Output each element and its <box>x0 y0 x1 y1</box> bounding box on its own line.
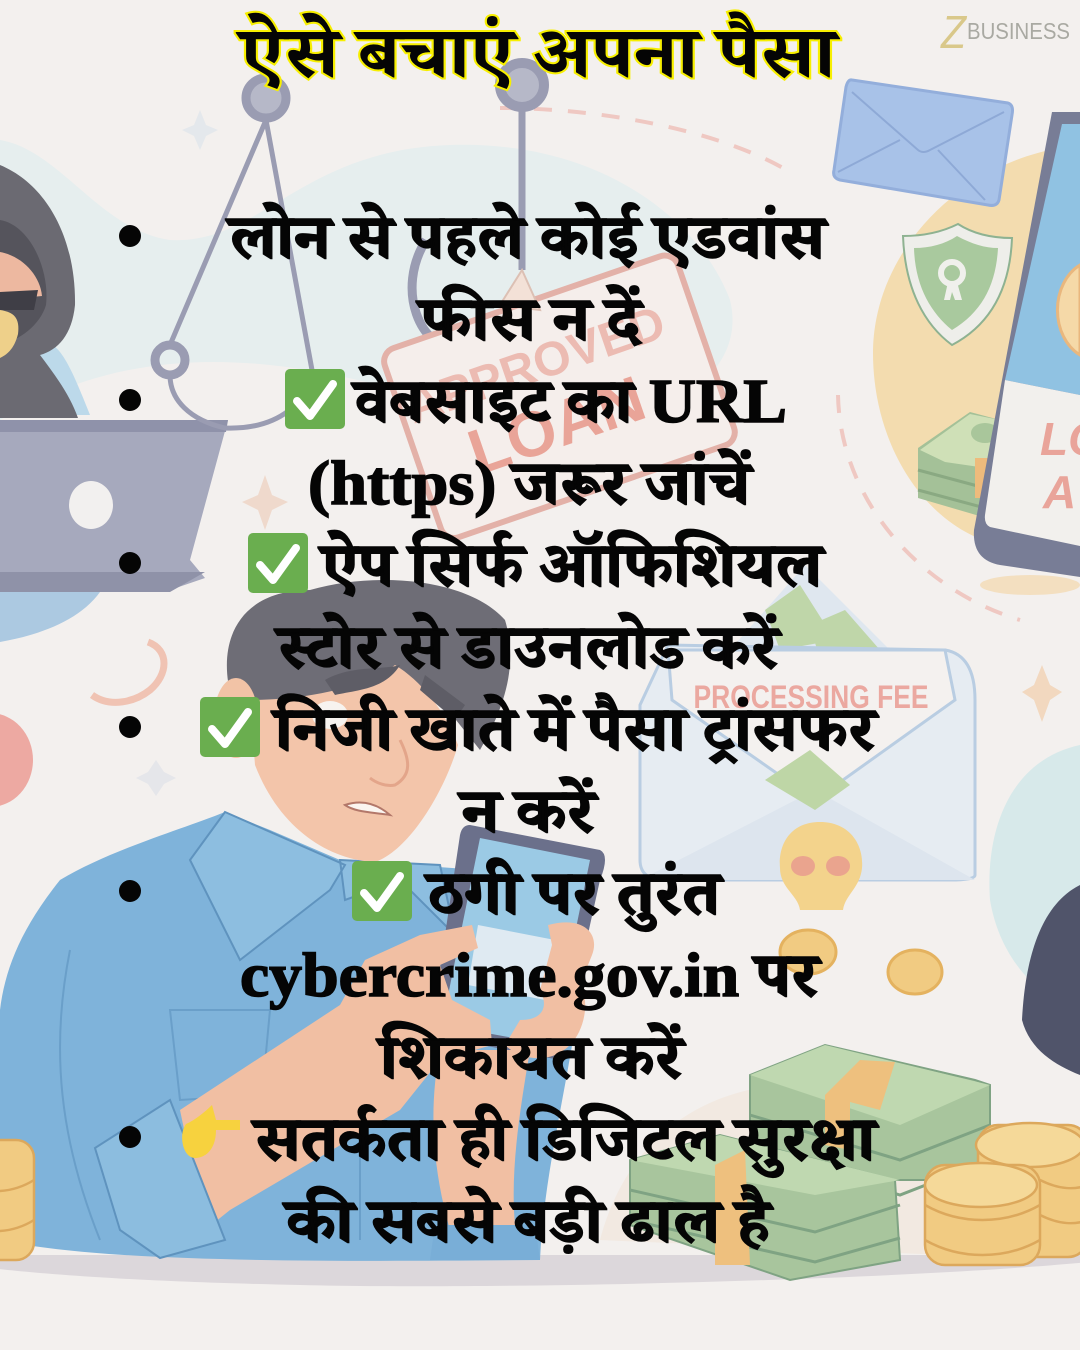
collar <box>190 812 455 960</box>
item 6: सतर्कता ही डिजिटल सुरक्षा <box>251 1104 880 1178</box>
envelope label: PROCESSING FEE <box>694 679 928 715</box>
item 3: ऐप सिर्फ ऑफिशियल <box>318 530 826 600</box>
approved loan tag: LOAN <box>459 362 654 489</box>
item 4: निजी खाते में पैसा ट्रांसफर <box>271 692 880 764</box>
icon: green check <box>248 533 308 593</box>
icon: pink ball <box>0 713 33 807</box>
item 1 text: लोन से पहले कोई एडवांस <box>225 202 829 272</box>
item 3: स्टोर से डाउनलोड करें <box>274 612 783 682</box>
icon: blue envelope <box>834 80 1012 205</box>
ear <box>214 678 258 758</box>
eyebrows <box>325 665 465 720</box>
tag string <box>500 270 540 310</box>
icon: pink hook outline <box>92 642 164 702</box>
item 2: वेबसाइट का URL <box>351 366 787 436</box>
cuff right <box>430 1225 540 1260</box>
item 6: की सबसे बड़ी ढाल है <box>282 1184 774 1256</box>
cash in envelope <box>765 585 880 660</box>
item 6 <box>182 1104 880 1256</box>
floor shadow <box>0 1255 1080 1286</box>
logo: Z Business: BUSINESS <box>967 18 1070 44</box>
title: ऐसे बचाएं अपना पैसा <box>235 11 841 93</box>
icon: green shield <box>903 224 1012 345</box>
face <box>250 665 458 862</box>
icon: man with phone <box>0 580 605 1261</box>
pale teal background blob <box>0 140 733 424</box>
icon: green check <box>200 697 260 757</box>
phone shadow <box>980 575 1080 595</box>
item 1 text <box>225 202 829 354</box>
item 4: न करें <box>457 776 599 846</box>
warm floor glow <box>600 1084 1060 1260</box>
hair <box>227 580 510 750</box>
yellow blob behind phone <box>873 148 1080 560</box>
icon: phone at right <box>974 112 1080 577</box>
fingers right <box>505 922 594 1058</box>
item 5 <box>240 858 823 1092</box>
item 5: ठगी पर तुरंत <box>424 858 725 932</box>
red dashed arc <box>500 108 1020 620</box>
icon: processing fee envelope <box>640 565 975 880</box>
approved loan tag <box>380 252 739 542</box>
icon: loose coins <box>780 930 942 994</box>
icon: scale with hook <box>155 78 312 428</box>
shirt <box>0 812 590 1261</box>
item 5: cybercrime.gov.in पर <box>240 942 823 1010</box>
icon: cash stacks at lower right <box>630 1045 990 1280</box>
icon: green check <box>285 369 345 429</box>
icon: teal circle at right <box>989 745 1080 1010</box>
list bullets <box>119 225 141 1148</box>
cuff left <box>95 1100 225 1258</box>
icon: pointing hand <box>182 1105 240 1158</box>
icon: green check <box>352 861 412 921</box>
item 1 text: फीस न दें <box>416 284 644 354</box>
item 3 <box>248 530 826 682</box>
item 2 <box>285 366 787 518</box>
mouth <box>345 802 390 815</box>
icon: dark suit figure <box>1022 885 1080 1075</box>
bullet list <box>119 202 880 1256</box>
icon: phone at right: A <box>1042 466 1076 518</box>
icon: laptop <box>0 420 228 642</box>
handset <box>430 825 605 1060</box>
icon: hacker at left <box>0 165 90 418</box>
logo: Z Business <box>940 6 1070 58</box>
item 4 <box>200 692 880 846</box>
icon: coin stacks <box>0 1123 1080 1265</box>
icon: money near phone <box>918 412 1000 522</box>
icon: skull <box>780 822 862 910</box>
icon: fishing hook <box>412 63 544 350</box>
item 2: (https) जरूर जांचें <box>308 448 755 518</box>
eye <box>312 701 348 729</box>
tag text: APPROVED <box>400 296 672 434</box>
icon: sparkle shapes <box>136 110 1062 796</box>
forearm right <box>433 1050 530 1230</box>
nose <box>370 740 408 785</box>
logo: Z Business: Z <box>940 6 968 58</box>
forearm left <box>180 925 492 1230</box>
item 5: शिकायत करें <box>376 1022 687 1092</box>
